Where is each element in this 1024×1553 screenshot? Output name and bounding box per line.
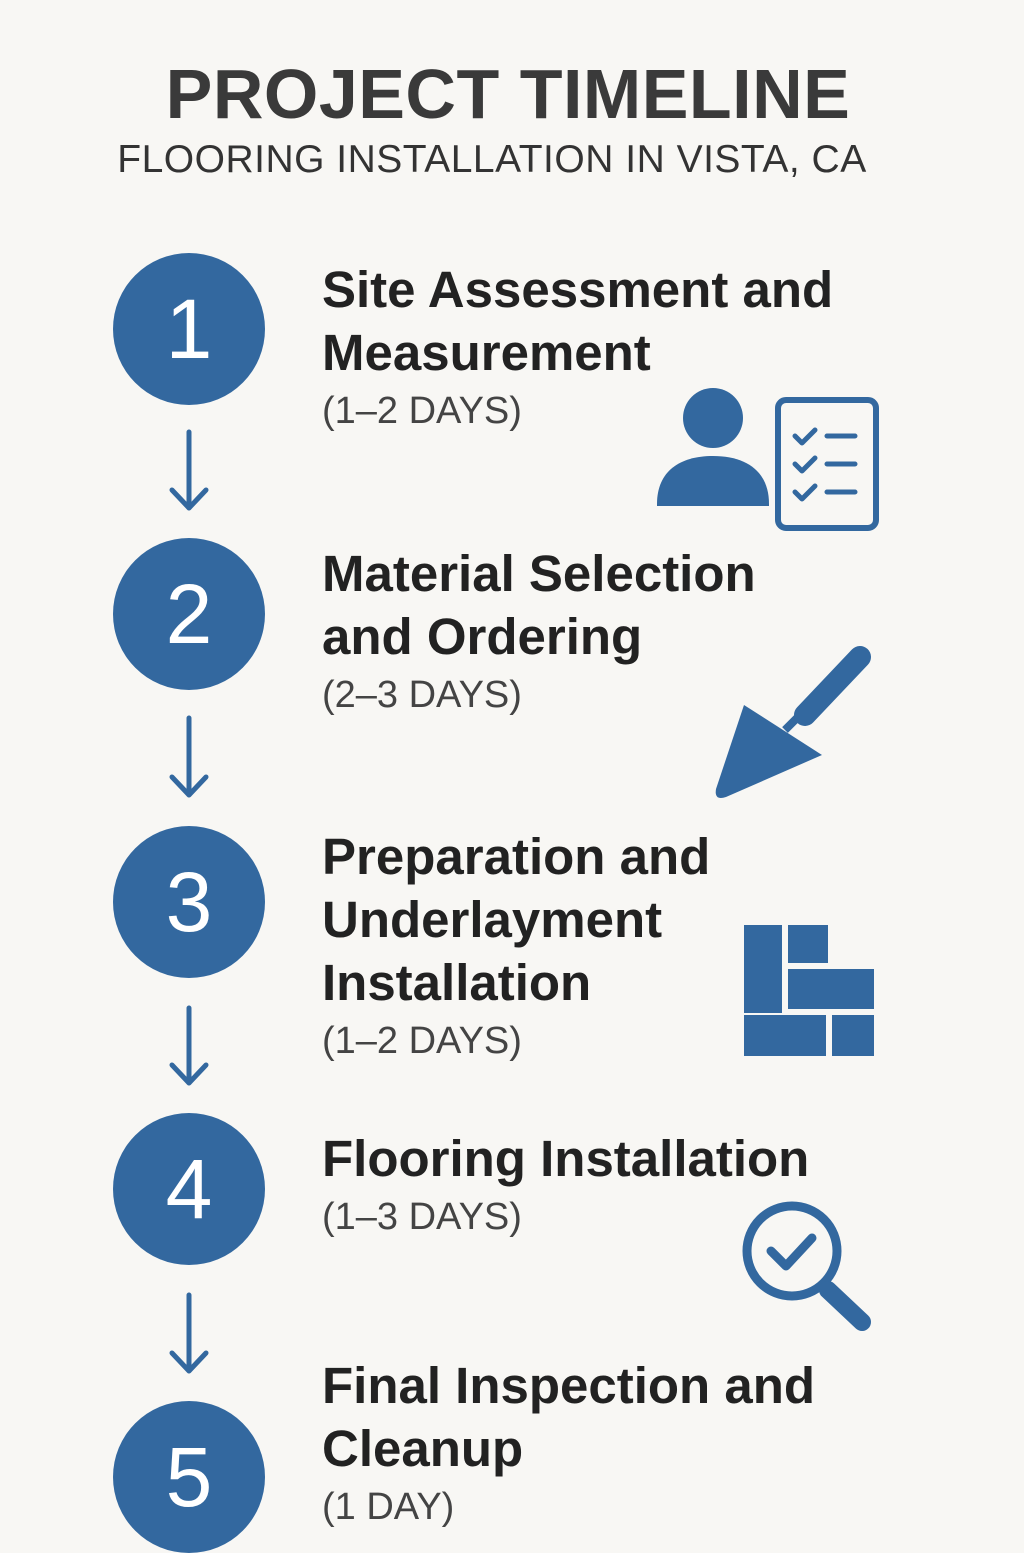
arrows	[170, 430, 208, 1374]
step 2 text: and Ordering	[322, 608, 642, 665]
circle 3	[113, 826, 265, 978]
circle 2: 2	[166, 567, 212, 661]
icon: trowel	[716, 646, 871, 798]
icon: bricks	[744, 925, 874, 1056]
step 1 text: Measurement	[322, 324, 651, 381]
circle 4: 4	[166, 1142, 212, 1236]
circle 2	[113, 538, 265, 690]
step 1 text: Site Assessment and	[322, 261, 833, 318]
icon: person with checklist	[657, 388, 879, 531]
circle 5	[113, 1401, 265, 1553]
step 5 text: Final Inspection and	[322, 1357, 815, 1414]
step 4 text: (1–3 DAYS)	[322, 1196, 522, 1238]
step 1 text	[322, 261, 833, 432]
step 2 text: (2–3 DAYS)	[322, 674, 522, 716]
subtitle: FLOORING INSTALLATION IN VISTA, CA	[117, 138, 867, 181]
title: PROJECT TIMELINE	[166, 55, 850, 133]
circle 1: 1	[166, 282, 212, 376]
circle 3: 3	[166, 855, 212, 949]
step 3 text: Preparation and	[322, 828, 710, 885]
step 5 text: Cleanup	[322, 1420, 523, 1477]
step 5 text	[322, 1357, 815, 1528]
step 3 text	[322, 828, 710, 1062]
step 2 text	[322, 545, 756, 716]
step 4 text: Flooring Installation	[322, 1130, 809, 1187]
step 3 text: Installation	[322, 954, 591, 1011]
step 3 text: (1–2 DAYS)	[322, 1020, 522, 1062]
circle 4	[113, 1113, 265, 1265]
step 4 text	[322, 1130, 809, 1238]
step 5 text: (1 DAY)	[322, 1486, 454, 1528]
icon: magnifier with check	[742, 1202, 871, 1331]
circle 5: 5	[166, 1430, 212, 1524]
circle 1	[113, 253, 265, 405]
step 1 text: (1–2 DAYS)	[322, 390, 522, 432]
step 3 text: Underlayment	[322, 891, 662, 948]
step 2 text: Material Selection	[322, 545, 756, 602]
